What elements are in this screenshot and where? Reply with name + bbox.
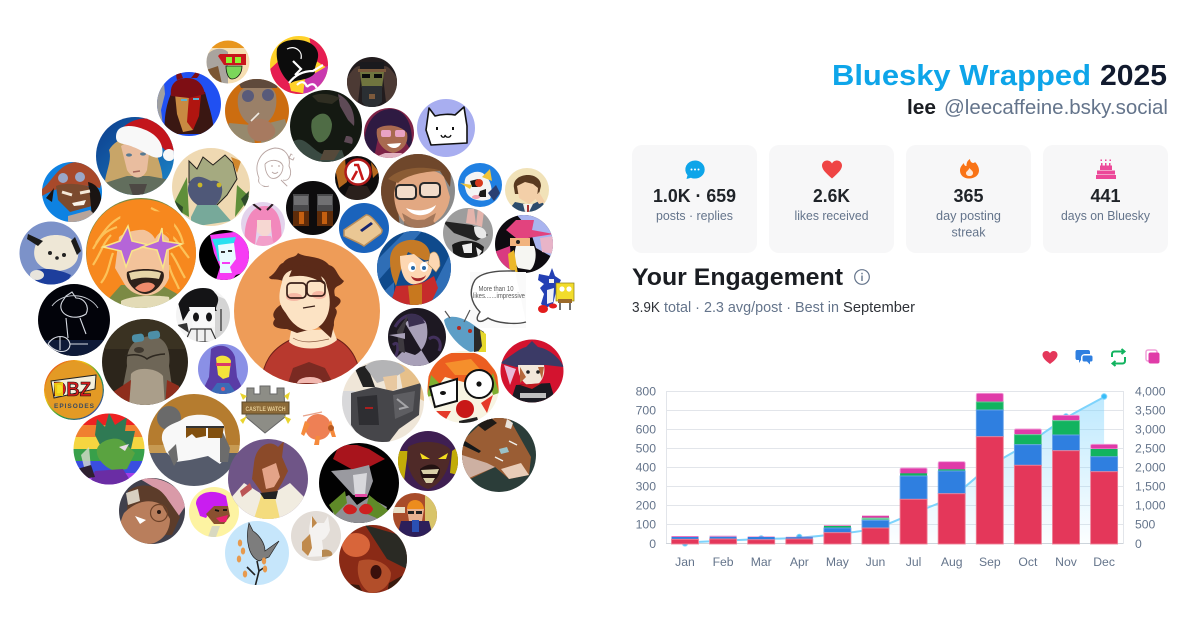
icon: info <box>855 270 869 284</box>
bar: Jul <box>900 468 927 544</box>
avatar: bird on orange leaf branch <box>225 521 289 587</box>
avatar: white puppy plush <box>19 221 83 287</box>
left axis labels: 200 <box>636 498 656 512</box>
right axis labels: 3,500 <box>1135 404 1166 418</box>
month labels: Aug <box>941 555 963 569</box>
icon: chat bubble <box>685 160 705 179</box>
month labels: Jan <box>675 555 695 569</box>
bar: Nov <box>1052 415 1080 544</box>
month labels: Jul <box>906 555 921 569</box>
left axis labels: 400 <box>636 460 656 474</box>
avatar: sonic and spongebob <box>538 268 574 313</box>
icon: reposts legend <box>1112 349 1125 366</box>
line points <box>682 394 1107 546</box>
right axis labels: 4,000 <box>1135 384 1166 398</box>
avatar: witch with starry hat <box>500 339 564 403</box>
avatar: silver hair mech armor <box>342 360 424 442</box>
panel: posts and replies: 1.0K · 659 <box>653 186 736 206</box>
left axis labels: 100 <box>636 518 656 532</box>
avatar: pink hat white beard pirate <box>494 214 554 274</box>
right axis labels: 2,000 <box>1135 460 1166 474</box>
title: 2025 <box>1100 60 1167 92</box>
icon: likes legend <box>1042 351 1058 364</box>
avatar: pencil sketch girl <box>257 148 295 188</box>
avatar: half-life lambda badge <box>335 156 379 200</box>
bar: May <box>824 525 851 544</box>
avatar: pink haired anime girl <box>241 202 285 246</box>
avatar: cyan magenta pixel face <box>199 230 249 280</box>
title: Bluesky Wrapped <box>832 60 1091 92</box>
month labels: Feb <box>713 555 734 569</box>
bar: Apr <box>786 537 813 544</box>
bar: Dec <box>1091 444 1118 544</box>
avatar: dark whiskey glasses <box>286 181 340 235</box>
bar: Oct <box>1014 429 1041 544</box>
chart: monthly engagement stacked bars with cumulative line <box>636 384 1166 569</box>
left axis labels: 700 <box>636 404 656 418</box>
avatar: cow with horn <box>458 163 502 207</box>
avatar: blue bug with yellow device <box>444 310 486 352</box>
avatar: grey wolf with red hat <box>319 443 399 523</box>
icon: quotes legend <box>1146 350 1160 364</box>
engagement summary: total · 2.3 avg/post · Best in <box>664 300 839 316</box>
avatar: santa hat blonde <box>95 117 175 196</box>
right axis labels: 0 <box>1135 537 1142 551</box>
left axis labels: 600 <box>636 422 656 436</box>
panel: days on Bluesky: 441 <box>1090 186 1120 206</box>
avatar: clown with glasses <box>427 351 499 423</box>
cumulative line <box>685 397 1104 542</box>
avatar: robot with green grin <box>206 40 250 84</box>
heading: your engagement: Your Engagement <box>632 264 843 291</box>
avatar: spiky black hair on yellow <box>269 35 329 95</box>
panel: day posting streak: 365 <box>954 186 984 206</box>
avatar: toast on blue <box>339 203 389 253</box>
avatar: shield with lightning: CASTLE WATCH <box>246 407 286 413</box>
user name and handle: @leecaffeine.bsky.social <box>944 97 1168 119</box>
avatar: cigarette man <box>223 79 291 143</box>
avatar: speech bubble meme <box>470 271 526 328</box>
avatar: brown haired anime boy <box>505 168 549 212</box>
avatar: green goblin on rainbow <box>73 413 145 485</box>
bar: Sep <box>976 393 1003 544</box>
avatar: otter with goggles <box>102 319 188 407</box>
avatar: purple elf <box>388 308 446 366</box>
right axis labels <box>1135 384 1166 551</box>
bar: Aug <box>938 462 965 544</box>
right axis labels: 500 <box>1135 518 1156 532</box>
avatar: cartoon boy with orange hair <box>377 231 451 305</box>
panel: days on Bluesky <box>1043 145 1168 253</box>
bar: Jan <box>672 536 698 544</box>
cumulative area <box>685 397 1104 544</box>
avatar: red devil cap <box>157 68 221 136</box>
panel: posts and replies <box>632 145 757 253</box>
bar: Feb <box>710 536 737 544</box>
month labels: Mar <box>751 555 772 569</box>
avatar: smiling man with glasses <box>380 152 455 228</box>
right axis labels: 3,000 <box>1135 422 1166 436</box>
panel: day posting streak: day posting <box>936 209 1001 223</box>
right axis labels: 2,500 <box>1135 442 1166 456</box>
left axis labels <box>636 384 656 551</box>
avatar: purple beast with yellow eyes <box>398 431 458 491</box>
right axis labels: 1,500 <box>1135 480 1166 494</box>
avatar: sheep with sunglasses <box>148 394 240 488</box>
month labels: May <box>826 555 850 569</box>
bar: Mar <box>748 536 775 544</box>
avatar: straw hat pirate <box>42 162 102 224</box>
chart legend icons <box>1042 349 1160 366</box>
avatar: cat folk with leaves <box>172 148 250 227</box>
icon: flame <box>960 159 979 178</box>
avatar: speech bubble meme: likes.......impressive <box>473 293 525 300</box>
icon: birthday cake <box>1096 160 1116 179</box>
avatar: pink beanie round glasses <box>119 478 186 544</box>
month labels: Sep <box>979 555 1001 569</box>
avatar: orange tabby sketch cat <box>291 511 341 561</box>
avatar: black hair skull girl <box>176 287 230 342</box>
left axis labels: 800 <box>636 384 656 398</box>
panel: posts and replies: posts · replies <box>656 209 733 223</box>
engagement summary <box>632 300 915 316</box>
avatar: blurry screaming face <box>339 525 407 593</box>
avatar: rainbow DBZ episodes logo <box>44 360 104 420</box>
panel: days on Bluesky: days on Bluesky <box>1061 209 1151 223</box>
avatar: pink glasses curly purple hair <box>364 108 414 158</box>
avatar: orange hat man drinking <box>393 493 437 537</box>
avatar: rainbow DBZ episodes logo: EPISODES <box>54 403 95 410</box>
panel: day posting streak <box>906 145 1031 253</box>
month labels: Apr <box>790 555 809 569</box>
avatar: shield with lightning <box>240 386 291 433</box>
avatar: purple hair smiling girl on yellow <box>189 487 239 537</box>
avatar: white cat on lavender <box>416 98 476 158</box>
panel: likes received: likes received <box>794 209 869 223</box>
avatar: lab coat brown hair character <box>228 439 308 519</box>
avatar: skeletor <box>198 344 248 394</box>
month labels <box>675 555 1115 569</box>
avatar: main portrait <box>234 238 380 391</box>
avatar bubble cluster <box>19 35 574 593</box>
avatar: orange curly hair with star eyes <box>86 198 196 309</box>
user name and handle: lee <box>907 97 936 119</box>
panel: day posting streak: streak <box>952 226 986 240</box>
panel: likes received: 2.6K <box>813 186 850 206</box>
avatar: speech bubble meme: More than 10 <box>478 286 514 293</box>
avatar: rainbow DBZ episodes logo: DBZ <box>53 379 91 401</box>
avatar: tan furred creature <box>462 418 536 492</box>
month labels: Dec <box>1093 555 1115 569</box>
month labels: Oct <box>1018 555 1038 569</box>
avatar: bearded orc with shades <box>347 57 397 107</box>
avatar: black night sketch <box>38 284 110 356</box>
avatar: dark forest hair <box>290 90 362 162</box>
engagement summary: September <box>843 300 915 316</box>
icon: replies legend <box>1076 350 1092 364</box>
month labels: Nov <box>1055 555 1078 569</box>
icon: heart <box>822 160 842 178</box>
left axis labels: 0 <box>649 537 656 551</box>
engagement summary: 3.9K <box>632 300 660 316</box>
panel: likes received <box>769 145 894 253</box>
avatar: orange bot <box>301 412 336 445</box>
left axis labels: 300 <box>636 480 656 494</box>
avatar: grey rat with pink ears <box>442 208 493 258</box>
bar: Jun <box>862 516 889 544</box>
month labels: Jun <box>866 555 885 569</box>
left axis labels: 500 <box>636 442 656 456</box>
right axis labels: 1,000 <box>1135 498 1166 512</box>
